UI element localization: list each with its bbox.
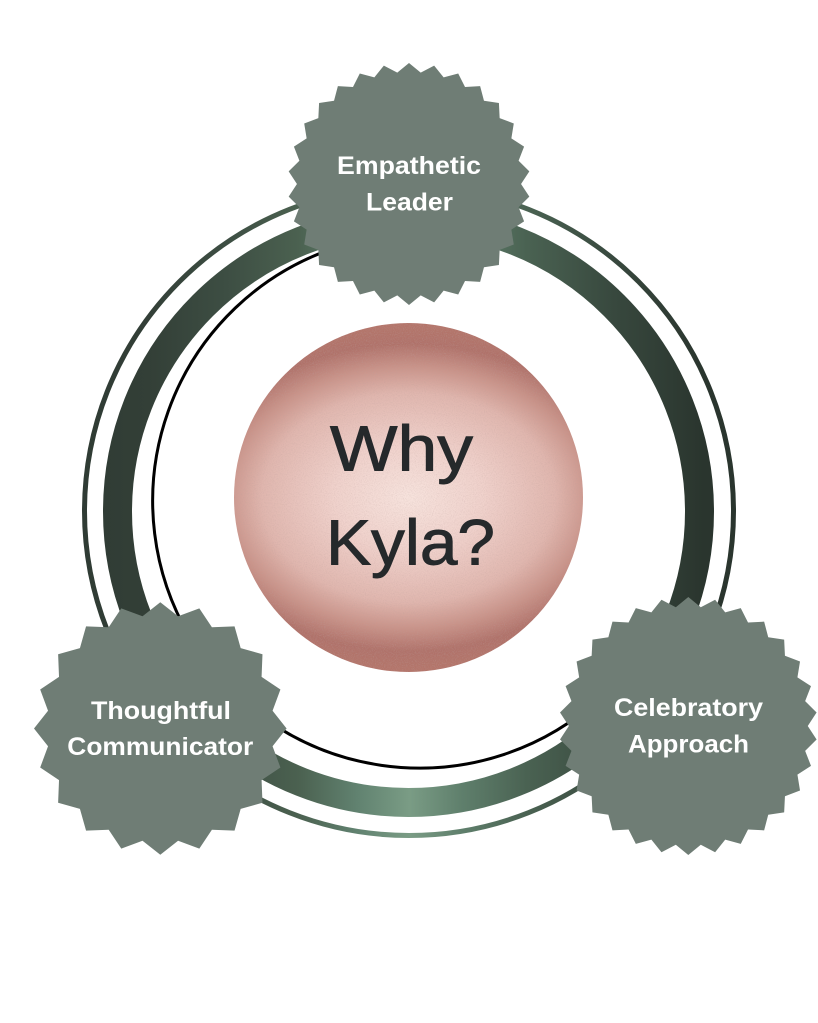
- badge: Celebratory Approach: [560, 597, 817, 855]
- label line: Approach: Approach: [628, 731, 749, 759]
- starburst top: [289, 63, 529, 305]
- label line: Leader: Leader: [366, 189, 453, 217]
- black inner arc: [153, 250, 600, 768]
- label line: Communicator: Communicator: [67, 733, 254, 761]
- gradient sphere: [234, 323, 583, 672]
- thin outer gradient ring: [84, 186, 734, 836]
- starburst bottom right: [560, 597, 817, 855]
- thick gradient ring: [118, 220, 700, 802]
- heading: Kyla?: Kyla?: [326, 506, 495, 578]
- badge: Empathetic Leader: [289, 63, 529, 305]
- label line: Celebratory: Celebratory: [614, 694, 763, 722]
- starburst bottom left: [34, 602, 287, 855]
- label line: Empathetic: Empathetic: [337, 152, 481, 180]
- heading: Why: Why: [330, 413, 473, 485]
- center circle: Why Kyla?: [234, 323, 583, 672]
- badge: Thoughtful Communicator: [34, 602, 287, 855]
- label line: Thoughtful: Thoughtful: [91, 697, 231, 725]
